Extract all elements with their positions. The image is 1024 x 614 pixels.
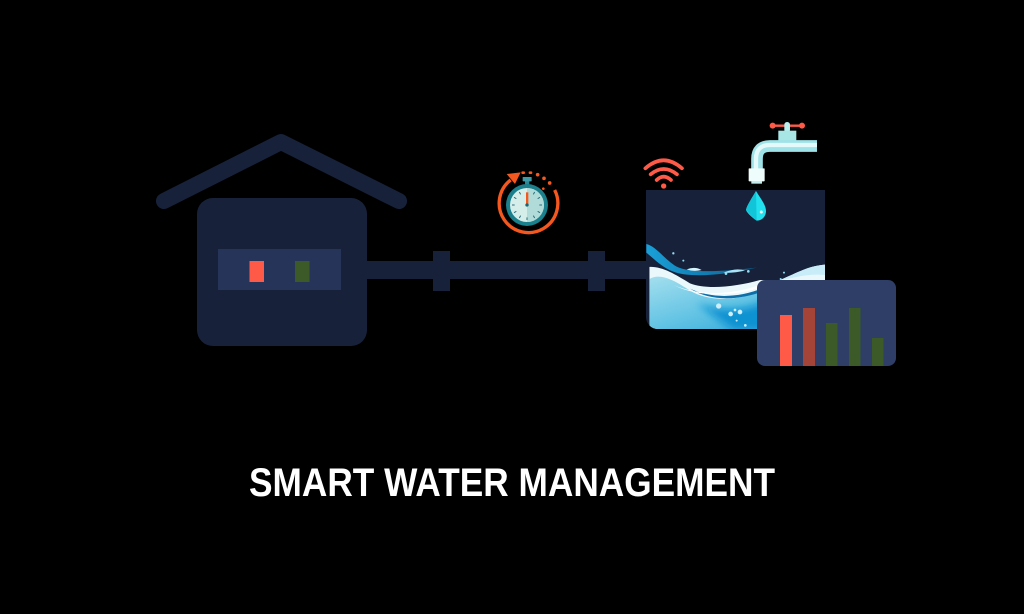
icon: stopwatch — [499, 171, 558, 233]
watch case — [506, 184, 548, 226]
title: SMART WATER MANAGEMENT — [249, 461, 775, 505]
icon: water tap — [749, 122, 817, 184]
tap handle — [773, 122, 802, 129]
status panel — [218, 249, 341, 290]
water wave illustration — [646, 244, 825, 330]
crown — [525, 180, 529, 185]
icon: wifi signal — [645, 160, 682, 189]
icon: water drop — [746, 191, 766, 221]
ticks — [512, 192, 542, 220]
hand — [526, 192, 528, 204]
house body — [197, 198, 367, 346]
timer arrow ring — [499, 180, 558, 233]
water tank — [646, 190, 825, 330]
house icon — [164, 142, 399, 346]
watch face — [510, 188, 544, 222]
bars — [780, 308, 884, 366]
bar chart panel — [757, 280, 896, 366]
tap spout — [757, 146, 817, 170]
pipe with couplings — [360, 251, 650, 291]
house roof — [164, 142, 399, 201]
